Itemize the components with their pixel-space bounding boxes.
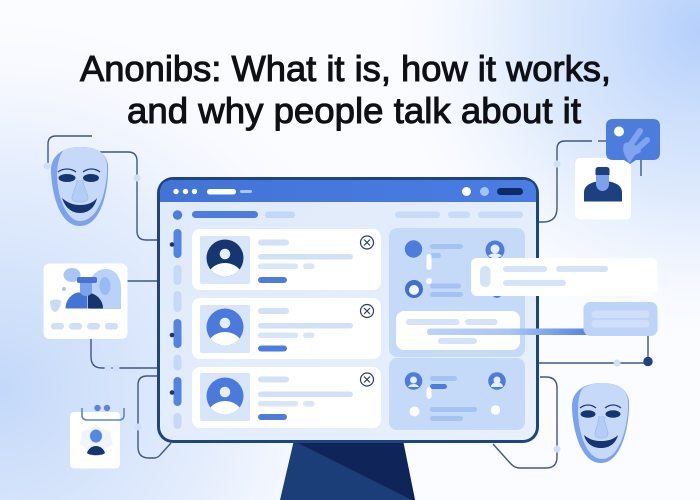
header bar <box>160 180 536 202</box>
close icon <box>360 373 374 386</box>
progress link bar <box>427 328 592 335</box>
title: Anonibs: What it is, how it works, <box>80 48 611 89</box>
avatar <box>206 378 244 415</box>
close icon <box>360 304 374 318</box>
title: and why people talk about it <box>127 90 581 131</box>
icon: chat bubble with image <box>606 119 660 164</box>
icon: right mask <box>572 383 629 463</box>
right panel bottom <box>389 358 525 430</box>
panel: left picture card <box>44 264 128 339</box>
screen <box>160 180 536 440</box>
avatar <box>206 308 244 346</box>
list card 2 <box>192 298 381 359</box>
hand shape <box>623 131 647 164</box>
connector nodes <box>44 160 653 452</box>
list card 3 <box>192 367 381 428</box>
floating card: white message <box>471 258 658 296</box>
panel: right portrait card <box>575 158 631 220</box>
list card 1 <box>192 229 381 290</box>
icon: left mask <box>51 147 108 226</box>
panel: left bottom ID card <box>70 405 124 468</box>
monitor <box>157 177 539 443</box>
connector lines <box>48 136 648 468</box>
avatar <box>206 240 244 277</box>
sidebar <box>170 229 182 429</box>
monitor frame <box>157 177 539 443</box>
title <box>80 48 611 131</box>
monitor stand <box>280 440 415 500</box>
close icon <box>360 236 374 249</box>
toolbar <box>173 210 523 220</box>
floating card: blue <box>584 302 658 336</box>
floating card: white reply <box>396 311 520 350</box>
right panel top <box>389 228 525 357</box>
